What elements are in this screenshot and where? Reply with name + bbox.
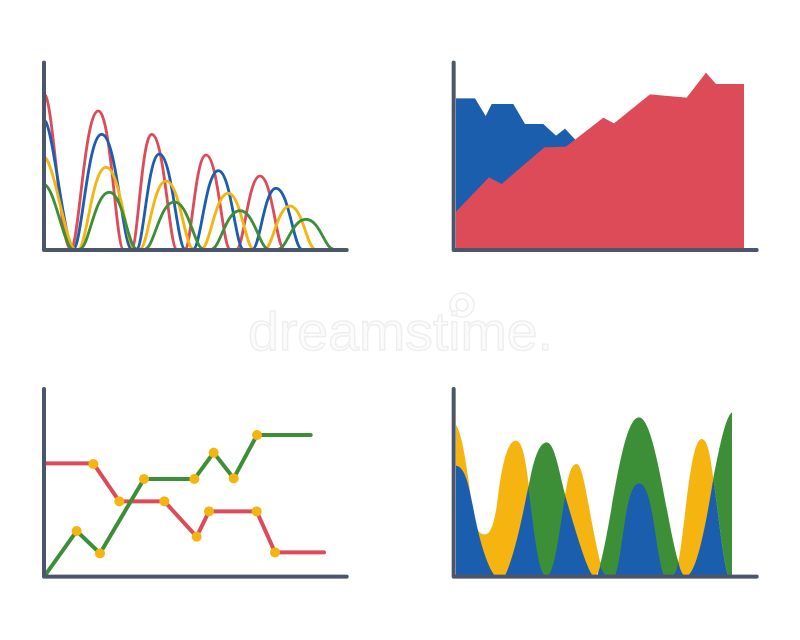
yellow area xyxy=(456,425,529,576)
panel: line chart with markers xyxy=(44,389,347,577)
yellow bell three xyxy=(678,439,713,576)
blue area, left xyxy=(456,466,495,576)
red line xyxy=(46,463,324,552)
panel: multi-series bell curve line chart xyxy=(44,63,347,250)
red area xyxy=(456,73,744,249)
yellow bell curves xyxy=(45,158,315,249)
green line xyxy=(46,435,311,574)
axes xyxy=(44,389,347,577)
green bell curves xyxy=(45,185,333,249)
red bell curves xyxy=(45,95,284,249)
yellow bell two xyxy=(565,464,601,576)
green bell two with blue bell inside xyxy=(600,417,678,576)
blue centre bell xyxy=(615,483,664,576)
blue bell curves xyxy=(45,121,302,249)
blue area, centre and right xyxy=(505,478,728,576)
green bell one xyxy=(528,442,565,576)
yellow markers xyxy=(72,430,280,558)
watermark: dreamstime: dreamstime. xyxy=(248,302,553,362)
green bell three xyxy=(713,412,732,576)
blue area xyxy=(456,98,575,249)
axes xyxy=(454,389,757,577)
axes xyxy=(454,63,757,250)
panel: layered smooth area chart xyxy=(454,389,757,577)
axes xyxy=(44,63,347,250)
panel: stacked area chart xyxy=(454,63,757,250)
